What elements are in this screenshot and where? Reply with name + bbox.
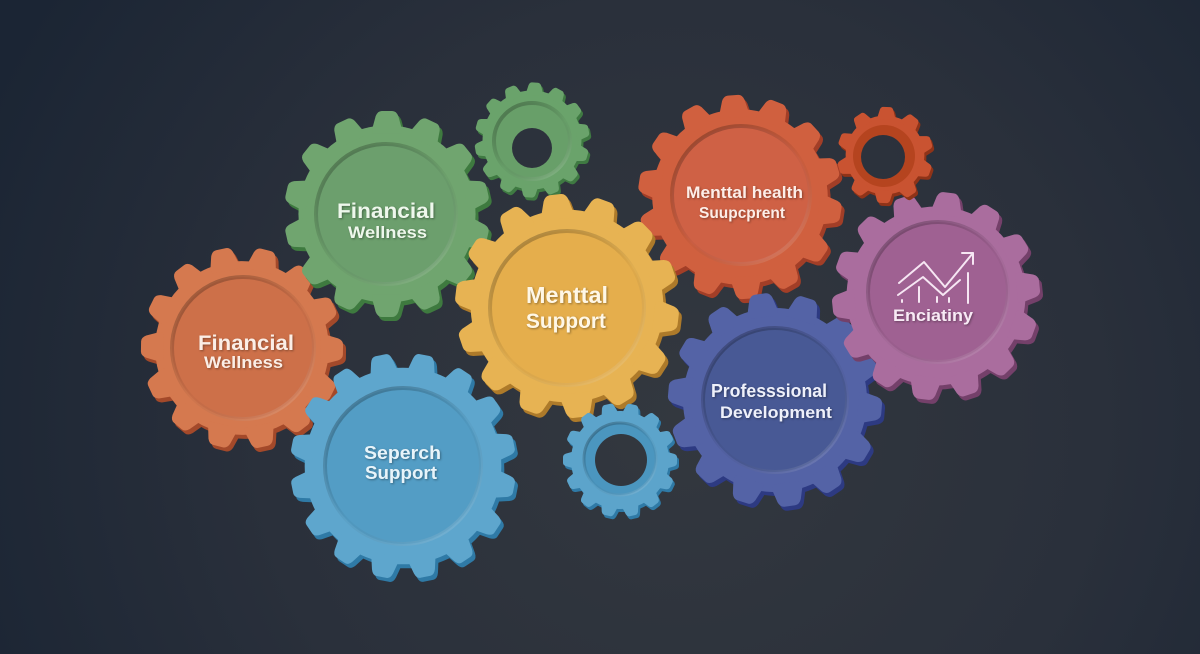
hole: small blue gear [595, 434, 647, 486]
label: professional development [711, 381, 832, 422]
hole: small green gear [512, 128, 552, 168]
label: financial wellness (orange): Wellness [204, 353, 283, 372]
label: professional development: Development [720, 403, 832, 422]
label: mental support: Menttal [526, 282, 608, 308]
label: financial wellness (orange) [198, 332, 294, 372]
gear: small blue [551, 392, 691, 531]
hole: small red gear [861, 135, 905, 179]
label: mental support [526, 282, 608, 333]
label: financial wellness (orange): Financial [198, 332, 294, 355]
label: financial wellness (green): Financial [337, 200, 435, 223]
icon: rising line chart with arrow [898, 253, 973, 303]
label: professional development: Professsional [711, 381, 827, 401]
label: mental health support: Menttal health [686, 183, 803, 202]
label: search support: Seperch [364, 443, 441, 463]
gear: blue search support [271, 334, 538, 602]
gear: green financial wellness [283, 111, 494, 321]
label: financial wellness (green): Wellness [348, 223, 427, 242]
gear: small red [835, 105, 937, 208]
gear: purple [819, 180, 1056, 416]
gear: red mental health [631, 88, 852, 310]
label: mental health support [686, 183, 803, 222]
label: search support: Support [365, 463, 437, 483]
label: mental support: Support [526, 310, 606, 333]
gear: navy professional development [654, 279, 899, 525]
gear: orange financial wellness [122, 228, 365, 472]
label: search support [364, 443, 441, 483]
gear: small green [471, 80, 595, 203]
label: financial wellness (green) [337, 200, 435, 242]
label: mental health support: Suupcprent [699, 205, 786, 222]
gear: yellow mental support [443, 183, 694, 433]
label: enciatiny: Enciatiny [893, 306, 974, 325]
